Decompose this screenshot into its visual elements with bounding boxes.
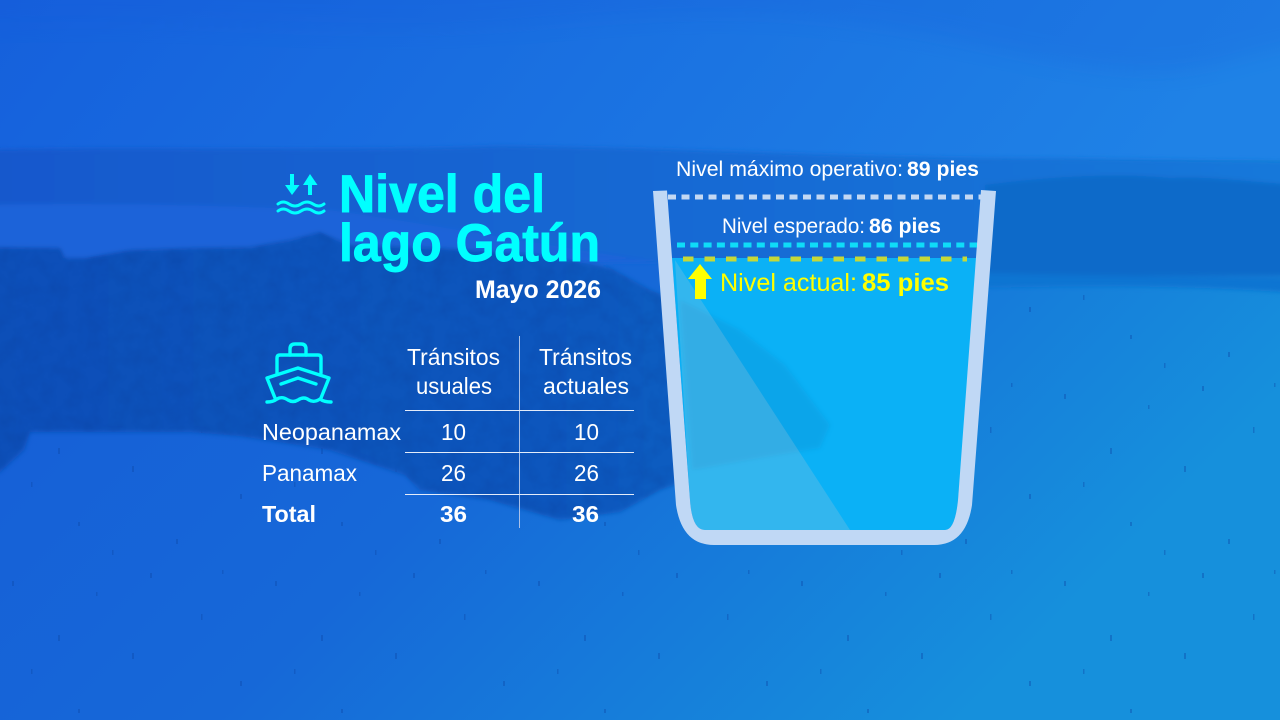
table header: current transits: Tránsitos [539, 344, 632, 370]
table header: current transits: actuales [543, 373, 629, 399]
table row: Panamax: 26 [574, 460, 599, 486]
table header: usual transits: usuales [416, 373, 492, 399]
label: expected level: 86 pies [869, 215, 941, 238]
label: maximum operating level: Nivel máximo operativo: [676, 158, 903, 181]
level line: expected [677, 242, 977, 248]
label: current level: 85 pies [862, 269, 949, 297]
icon: water level arrows and waves [278, 174, 324, 213]
table row: Total: 36 [572, 501, 599, 527]
table grid lines [405, 336, 634, 528]
table of transits [262, 336, 634, 528]
table row: Panamax: Panamax [262, 460, 357, 486]
level line: current [683, 256, 967, 262]
level line: maximum operating [668, 194, 981, 200]
label: expected level: Nivel esperado: [722, 215, 865, 238]
table row: Neopanamax: 10 [574, 419, 599, 445]
glass: light reflection on the water [675, 260, 850, 530]
glass outline [653, 190, 996, 545]
title: lago Gatún [339, 214, 600, 273]
table row: Panamax: 26 [441, 460, 466, 486]
label: current level: Nivel actual: [720, 269, 857, 297]
title: Nivel del [339, 165, 545, 224]
table row: Neopanamax: 10 [441, 419, 466, 445]
table header: usual transits: Tránsitos [407, 344, 500, 370]
icon: yellow up arrow [688, 264, 712, 299]
label: maximum operating level: 89 pies [907, 158, 979, 181]
glass: island tint seen through water [680, 300, 830, 470]
table row: Total: Total [262, 501, 316, 527]
icon: ship [267, 344, 331, 402]
table row: Total: 36 [440, 501, 467, 527]
table row: Neopanamax: Neopanamax [262, 419, 402, 445]
date subtitle: Mayo 2026 [475, 276, 601, 304]
glass: water fill at current level [672, 258, 978, 530]
